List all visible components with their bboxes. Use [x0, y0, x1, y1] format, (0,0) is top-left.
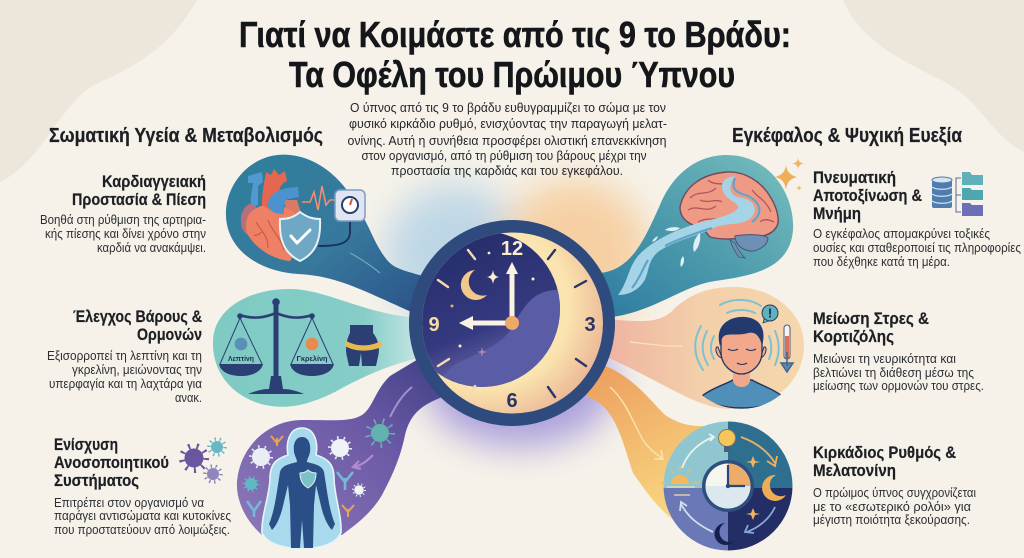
icon: viruses and antibodies [244, 387, 412, 517]
intro text [348, 100, 667, 178]
text block: stress and cortisol [813, 309, 984, 393]
intro text: προστασία της καρδιάς και του εγκεφάλου. [391, 163, 623, 178]
icon: database and folders [932, 172, 983, 216]
panel: stress blob [596, 287, 804, 409]
icon: shield [280, 212, 320, 261]
text block: circadian rhythm: Κιρκάδιος Ρυθμός & [813, 443, 956, 462]
intro text: στον οργανισμό, από τη ρύθμιση του βάρους μέχρι την [362, 148, 646, 163]
text block: weight and hormones: γκρελίνη, μειώνοντας την [72, 362, 202, 377]
clock numerals [428, 238, 596, 412]
text block: circadian rhythm [813, 443, 976, 527]
text block: weight and hormones: υπερφαγία και τη λαχτάρα για [49, 376, 202, 391]
text block: weight and hormones: Εξισορροπεί τη λεπτίνη και τη [47, 348, 202, 363]
intro text: φυσικό κιρκάδιο ρυθμό, ενισχύοντας την παραγωγή μελατ- [349, 116, 667, 131]
text block: immune system: Ενίσχυση [54, 435, 118, 454]
text block: detox and memory: Πνευματική [813, 168, 896, 187]
text block: cardiovascular [40, 172, 206, 255]
text block: detox and memory [813, 168, 1021, 269]
icon: brain with water flow [618, 157, 804, 295]
clock numerals: 3 [584, 314, 596, 336]
icon: circadian cycle [661, 421, 794, 554]
icon: virus cluster [182, 439, 225, 482]
text block: immune system [54, 435, 231, 537]
text block: circadian rhythm: μέγιστη ποιότητα ξεκούρασης. [813, 512, 970, 527]
text block: detox and memory: που δέχθηκε κατά τη μέρα. [813, 254, 950, 269]
clock numerals: 12 [501, 238, 523, 260]
title: Τα Οφέλη του Πρώιμου Ύπνου [289, 54, 735, 95]
arrow: circadian tail [610, 387, 663, 459]
title [239, 14, 791, 95]
label: ghrelin: Γκρελίνη [296, 354, 328, 363]
text block: cardiovascular: Βοηθά στη ρύθμιση της αρτηρια- [40, 212, 206, 227]
text block: detox and memory: Μνήμη [813, 204, 861, 223]
text block: immune system: που προστατεύουν από λοιμώξεις. [54, 522, 230, 537]
text block: stress and cortisol: Μείωση Στρες & [813, 309, 929, 328]
text block: cardiovascular: κής πίεσης και δίνει χρόνο στην [45, 226, 206, 241]
clock glow [385, 180, 650, 447]
icon: sparkle [775, 165, 797, 190]
icon: heart and blood pressure [241, 169, 380, 273]
text block: immune system: Συστήματος [54, 471, 139, 490]
text block: immune system: Επιτρέπει στον οργανισμό να [54, 495, 204, 510]
text block: circadian rhythm: Ο πρώιμος ύπνος συγχρονίζεται [813, 485, 976, 500]
panel: brain blob [600, 155, 793, 318]
text block: weight and hormones: Έλεγχος Βάρους & [73, 307, 202, 326]
clock hands [506, 262, 518, 323]
panel: scales blob [213, 289, 430, 407]
icon: calm person [630, 300, 793, 408]
clock ticks [438, 250, 586, 397]
text block: weight and hormones: Ορμονών [137, 325, 202, 344]
text block: detox and memory: Ο εγκέφαλος απομακρύνει τοξικές [813, 226, 990, 241]
clock numerals: 6 [506, 390, 518, 412]
intro text: ονίνης. Αυτή η συνήθεια προσφέρει ολιστική επανεκκίνηση [348, 133, 666, 148]
panel: heart blob [226, 155, 430, 318]
text block: cardiovascular: Καρδιαγγειακή [102, 172, 206, 191]
intro text: Ο ύπνος από τις 9 το βράδυ ευθυγραμμίζει το σώμα με τον [350, 100, 666, 115]
text block: stress and cortisol: βελτιώνει τη διάθεση μέσω της [813, 365, 974, 380]
text block: cardiovascular: καρδιά να ανακάμψει. [97, 240, 206, 255]
clock [404, 220, 615, 426]
text block: stress and cortisol: μείωσης των ορμονών του στρες. [813, 378, 984, 393]
text block: cardiovascular: Προστασία & Πίεση [72, 190, 206, 209]
text block: circadian rhythm: Μελατονίνη [813, 461, 896, 480]
heading: brain wellbeing: Εγκέφαλος & Ψυχική Ευεξία [732, 124, 962, 147]
title: Γιατί να Κοιμάστε από τις 9 το Βράδυ: [239, 14, 791, 55]
text block: weight and hormones: ανακ. [175, 390, 202, 405]
clock moon [461, 270, 487, 300]
label: leptin: Λεπτίνη [228, 354, 254, 363]
text block: detox and memory: Αποτοξίνωση & [813, 186, 922, 205]
heading: body health: Σωματική Υγεία & Μεταβολισμός [49, 124, 323, 147]
panel: immune blob [237, 358, 445, 535]
panel: circadian tail [585, 358, 715, 530]
text block: weight and hormones [47, 307, 202, 405]
clock numerals: 9 [428, 314, 440, 336]
icon: scales [219, 298, 381, 394]
text block: stress and cortisol: Μειώνει τη νευρικότητα και [813, 351, 956, 366]
icon: body with aura [244, 387, 412, 549]
text block: immune system: παράγει αντισώματα και κυτοκίνες [54, 508, 231, 523]
corner blob: top right [843, 0, 1024, 152]
corner blob: top left [0, 0, 197, 182]
text block: stress and cortisol: Κορτιζόλης [813, 327, 894, 346]
text block: circadian rhythm: με το «εσωτερικό ρολόι» για [813, 499, 971, 514]
text block: immune system: Ανοσοποιητικού [54, 453, 169, 472]
